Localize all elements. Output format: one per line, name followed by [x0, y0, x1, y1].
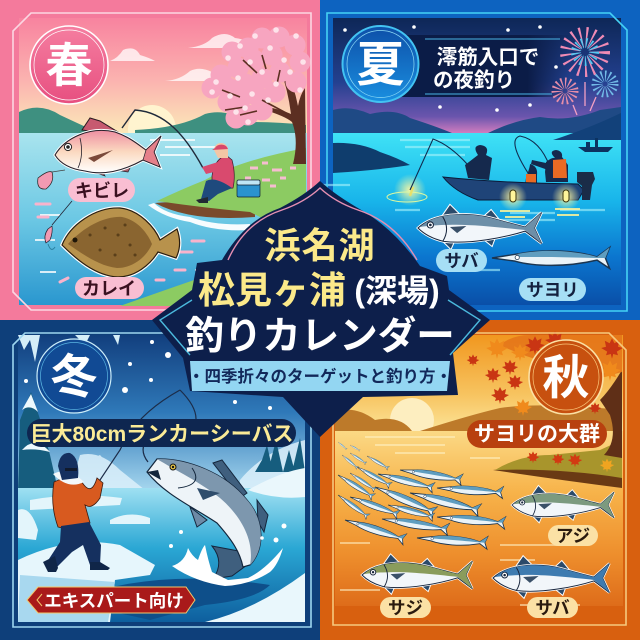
near hill [333, 143, 410, 173]
frame [13, 13, 311, 310]
boots [43, 556, 110, 572]
orange leaves [486, 338, 621, 416]
autumn water [335, 431, 623, 606]
panel: summer [320, 0, 640, 320]
subtitle ribbon [188, 361, 452, 391]
splash droplets [169, 524, 286, 548]
autumn hills [335, 405, 622, 431]
icicles [18, 335, 120, 362]
maple tree [467, 331, 623, 472]
anglers [465, 145, 568, 186]
season badge: spring: 春 [46, 39, 92, 92]
pectoral fin [88, 150, 113, 162]
fish: saba [493, 556, 609, 598]
season badge: autumn: 秋 [542, 351, 590, 404]
hull [443, 177, 584, 200]
grass [157, 148, 306, 240]
hook lure [45, 201, 72, 249]
night sky [333, 18, 621, 134]
rods and lines [410, 136, 550, 190]
fallen yellow leaf [600, 459, 614, 472]
grass bottom [120, 278, 215, 306]
sun [128, 105, 176, 153]
title line 1: 浜名湖 [264, 225, 376, 266]
blossom masses [212, 37, 300, 118]
ice shelf right [248, 468, 305, 498]
night mountains [333, 107, 621, 133]
fishing rod line [80, 390, 196, 510]
winter background [0, 320, 320, 640]
cooler box [237, 180, 260, 197]
autumn background [320, 320, 640, 640]
foliage mass [500, 335, 622, 378]
water highlights [35, 140, 215, 272]
dark water [100, 579, 270, 620]
title line 3: 釣りカレンダー [185, 315, 455, 358]
legs [47, 522, 101, 570]
label: kibire [68, 178, 135, 202]
night water [333, 133, 621, 305]
head and cap [214, 143, 228, 158]
season badge: spring [30, 26, 108, 104]
shore [493, 440, 622, 488]
gill [178, 468, 196, 488]
blossom flowers [212, 30, 303, 122]
badge: experts: エキスパート向け [44, 591, 184, 611]
angler [43, 453, 110, 572]
head [58, 453, 78, 480]
label: saba [436, 249, 487, 272]
label: ranker sea bass: 巨大80cmランカーシーバス [30, 423, 294, 446]
lantern reflections [500, 209, 580, 217]
arm [531, 160, 548, 170]
ice floe under angler [18, 542, 155, 622]
fish: kibire sea bream [55, 118, 161, 176]
spring background [0, 0, 320, 320]
label: saba: サバ [535, 598, 570, 618]
title line 2: (深場) [354, 273, 440, 309]
mouth [147, 470, 161, 480]
summer background [320, 0, 640, 320]
season badge: winter [37, 339, 111, 413]
inner body [68, 217, 152, 268]
pectoral fin [197, 488, 220, 500]
motor [577, 172, 595, 200]
snow mountains [60, 440, 305, 490]
fish: sayori [492, 248, 610, 268]
dorsal fin [82, 118, 136, 143]
water splash [172, 545, 283, 586]
badge shape [152, 181, 490, 437]
far hill [553, 113, 621, 140]
lanterns [499, 183, 527, 211]
distant boat [578, 138, 613, 152]
fur hood [53, 471, 84, 485]
central title badge [152, 181, 490, 437]
shrimp bait [38, 170, 65, 189]
jacket [212, 155, 234, 190]
fish: flounder [62, 208, 180, 277]
badge: experts [27, 587, 195, 613]
fallen blossoms [245, 163, 296, 186]
sayori school [336, 441, 506, 549]
jacket [53, 478, 103, 529]
lake water [19, 133, 307, 305]
label: aji: アジ [556, 526, 590, 546]
eye [72, 238, 78, 242]
label: karei: カレイ [82, 279, 136, 299]
label: kibire: キビレ [75, 180, 129, 201]
back [157, 459, 261, 565]
panel: winter [0, 320, 320, 640]
fallen leaves [527, 451, 582, 467]
season badge: autumn [529, 340, 603, 414]
clouds [110, 34, 256, 81]
body [147, 459, 261, 567]
label: sayori school: サヨリの大群 [474, 423, 600, 446]
label: sayori [519, 278, 586, 301]
panel: autumn [320, 320, 640, 640]
stars [343, 25, 558, 112]
earth [155, 202, 255, 218]
shore foam [148, 203, 250, 230]
fish: giant sea bass [147, 459, 268, 579]
season badge: winter: 冬 [50, 350, 98, 403]
petals on water [36, 204, 204, 282]
tail colour [143, 136, 161, 167]
water shine [320, 140, 605, 270]
eye [64, 143, 72, 151]
season badge: summer [342, 26, 418, 102]
tail [212, 546, 247, 579]
arm [202, 162, 222, 174]
dorsal fins [213, 460, 268, 532]
sun [390, 398, 434, 442]
label: saji [380, 597, 431, 618]
banner: 澪筋入口で [437, 46, 539, 69]
fireworks [557, 37, 613, 115]
frame [333, 333, 626, 625]
eye [170, 464, 176, 470]
boots [196, 197, 208, 203]
spots [90, 225, 135, 255]
red leaves [467, 331, 623, 414]
label: saba [527, 597, 578, 618]
branches [222, 55, 288, 115]
panel: spring [0, 0, 320, 320]
lake ice water [18, 488, 305, 622]
float glow [387, 174, 427, 206]
cyan diamonds [160, 300, 480, 355]
autumn sky [335, 335, 623, 433]
life vests [526, 159, 567, 185]
snow [24, 340, 272, 410]
water shine [340, 437, 580, 605]
label: aji [548, 525, 598, 546]
title line 2: 松見ヶ浦 [198, 270, 346, 311]
banner [400, 35, 570, 97]
cherry tree [212, 30, 306, 164]
subtitle ribbon: ・四季折々のターゲットと釣り方・ [188, 366, 452, 386]
fish: aji [512, 485, 614, 523]
fins [88, 160, 134, 176]
frame [327, 13, 627, 311]
frame [13, 333, 311, 627]
lower fins [190, 507, 247, 547]
boat [443, 145, 595, 211]
season badge: summer: 夏 [356, 39, 405, 92]
ice lower right [205, 573, 305, 622]
body [62, 208, 180, 277]
fish: saji [362, 554, 472, 594]
winter sky [18, 335, 305, 490]
rod and line [122, 110, 203, 168]
label: saji: サジ [388, 598, 423, 618]
body [55, 130, 161, 173]
ice far [18, 495, 150, 540]
label: saba: サバ [444, 251, 479, 271]
angler [196, 143, 234, 203]
shore island [148, 148, 306, 240]
legs [201, 180, 232, 201]
spring sky [19, 18, 307, 134]
trunk [600, 370, 622, 458]
title line 2 [198, 270, 440, 311]
label: sayori: サヨリ [526, 280, 579, 300]
snow on pine [22, 394, 50, 452]
gill [78, 138, 82, 168]
trunk [262, 66, 306, 164]
mountains [19, 108, 306, 134]
pines [18, 392, 305, 490]
fish: mackerel [418, 204, 542, 250]
banner: の夜釣り [433, 69, 515, 92]
pink arcs [228, 188, 417, 260]
